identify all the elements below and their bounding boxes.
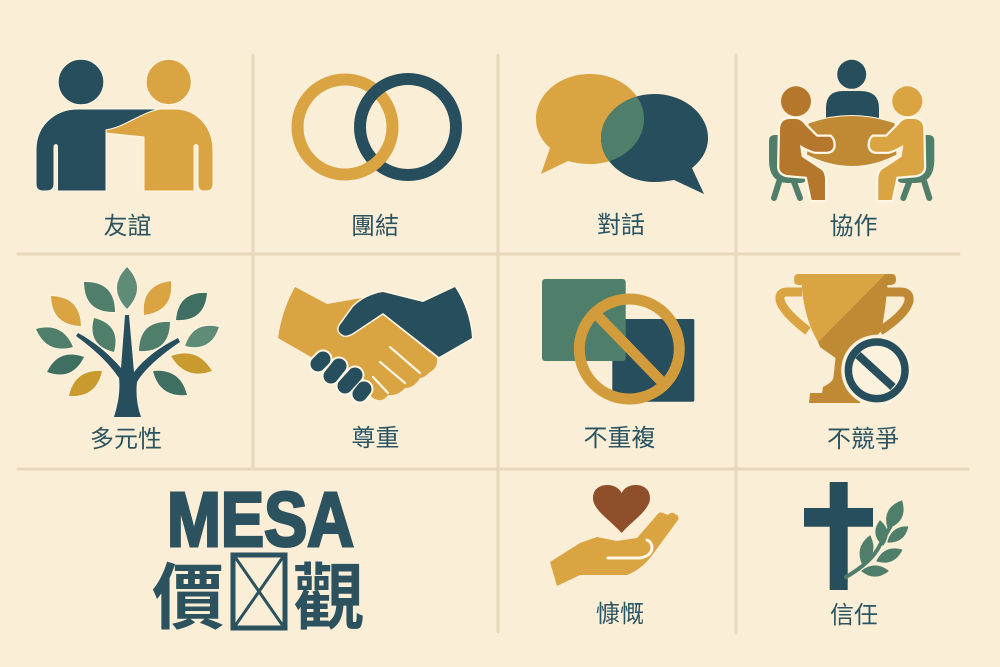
panel: unity — [298, 79, 456, 240]
label: no competition: 不競爭 — [827, 426, 899, 453]
panel: friendship — [36, 59, 213, 240]
title: MESA: MESA — [167, 477, 354, 563]
icon: cross with olive branch — [804, 482, 908, 590]
icon: tree with coloured leaves — [36, 267, 219, 417]
icon: overlapping squares with prohibition sign — [542, 279, 694, 402]
panel: respect — [278, 287, 472, 452]
panel: dialogue — [536, 74, 708, 239]
title: missing glyph box — [233, 555, 285, 628]
panel: MESA logo title — [152, 477, 365, 639]
label: respect: 尊重 — [352, 425, 400, 452]
title: first character: 價 — [152, 559, 224, 639]
label: collaboration: 協作 — [830, 213, 878, 240]
label: unity: 團結 — [351, 213, 399, 240]
icon: two people with arm around shoulder — [36, 59, 213, 191]
icon: trophy with prohibition badge — [780, 274, 912, 406]
label: dialogue: 對話 — [597, 212, 645, 239]
label: friendship: 友誼 — [104, 213, 152, 240]
title: last character: 觀 — [293, 559, 365, 639]
panel: no competition — [780, 274, 912, 453]
label: diversity: 多元性 — [90, 426, 162, 453]
panel: diversity — [36, 267, 219, 453]
icon: handshake — [278, 287, 472, 400]
icon: three people around a table — [769, 60, 934, 200]
label: no duplication: 不重複 — [584, 425, 656, 452]
label: faith: 信任 — [830, 602, 878, 629]
icon: overlapping speech bubbles — [536, 74, 708, 194]
icon: hand holding heart — [550, 485, 679, 586]
panel: collaboration — [769, 60, 934, 240]
label: generosity: 慷慨 — [596, 601, 644, 628]
panel: generosity — [550, 485, 679, 628]
panel: no duplication — [542, 279, 694, 452]
panel: faith — [804, 482, 908, 629]
icon: interlocked rings — [298, 79, 456, 175]
